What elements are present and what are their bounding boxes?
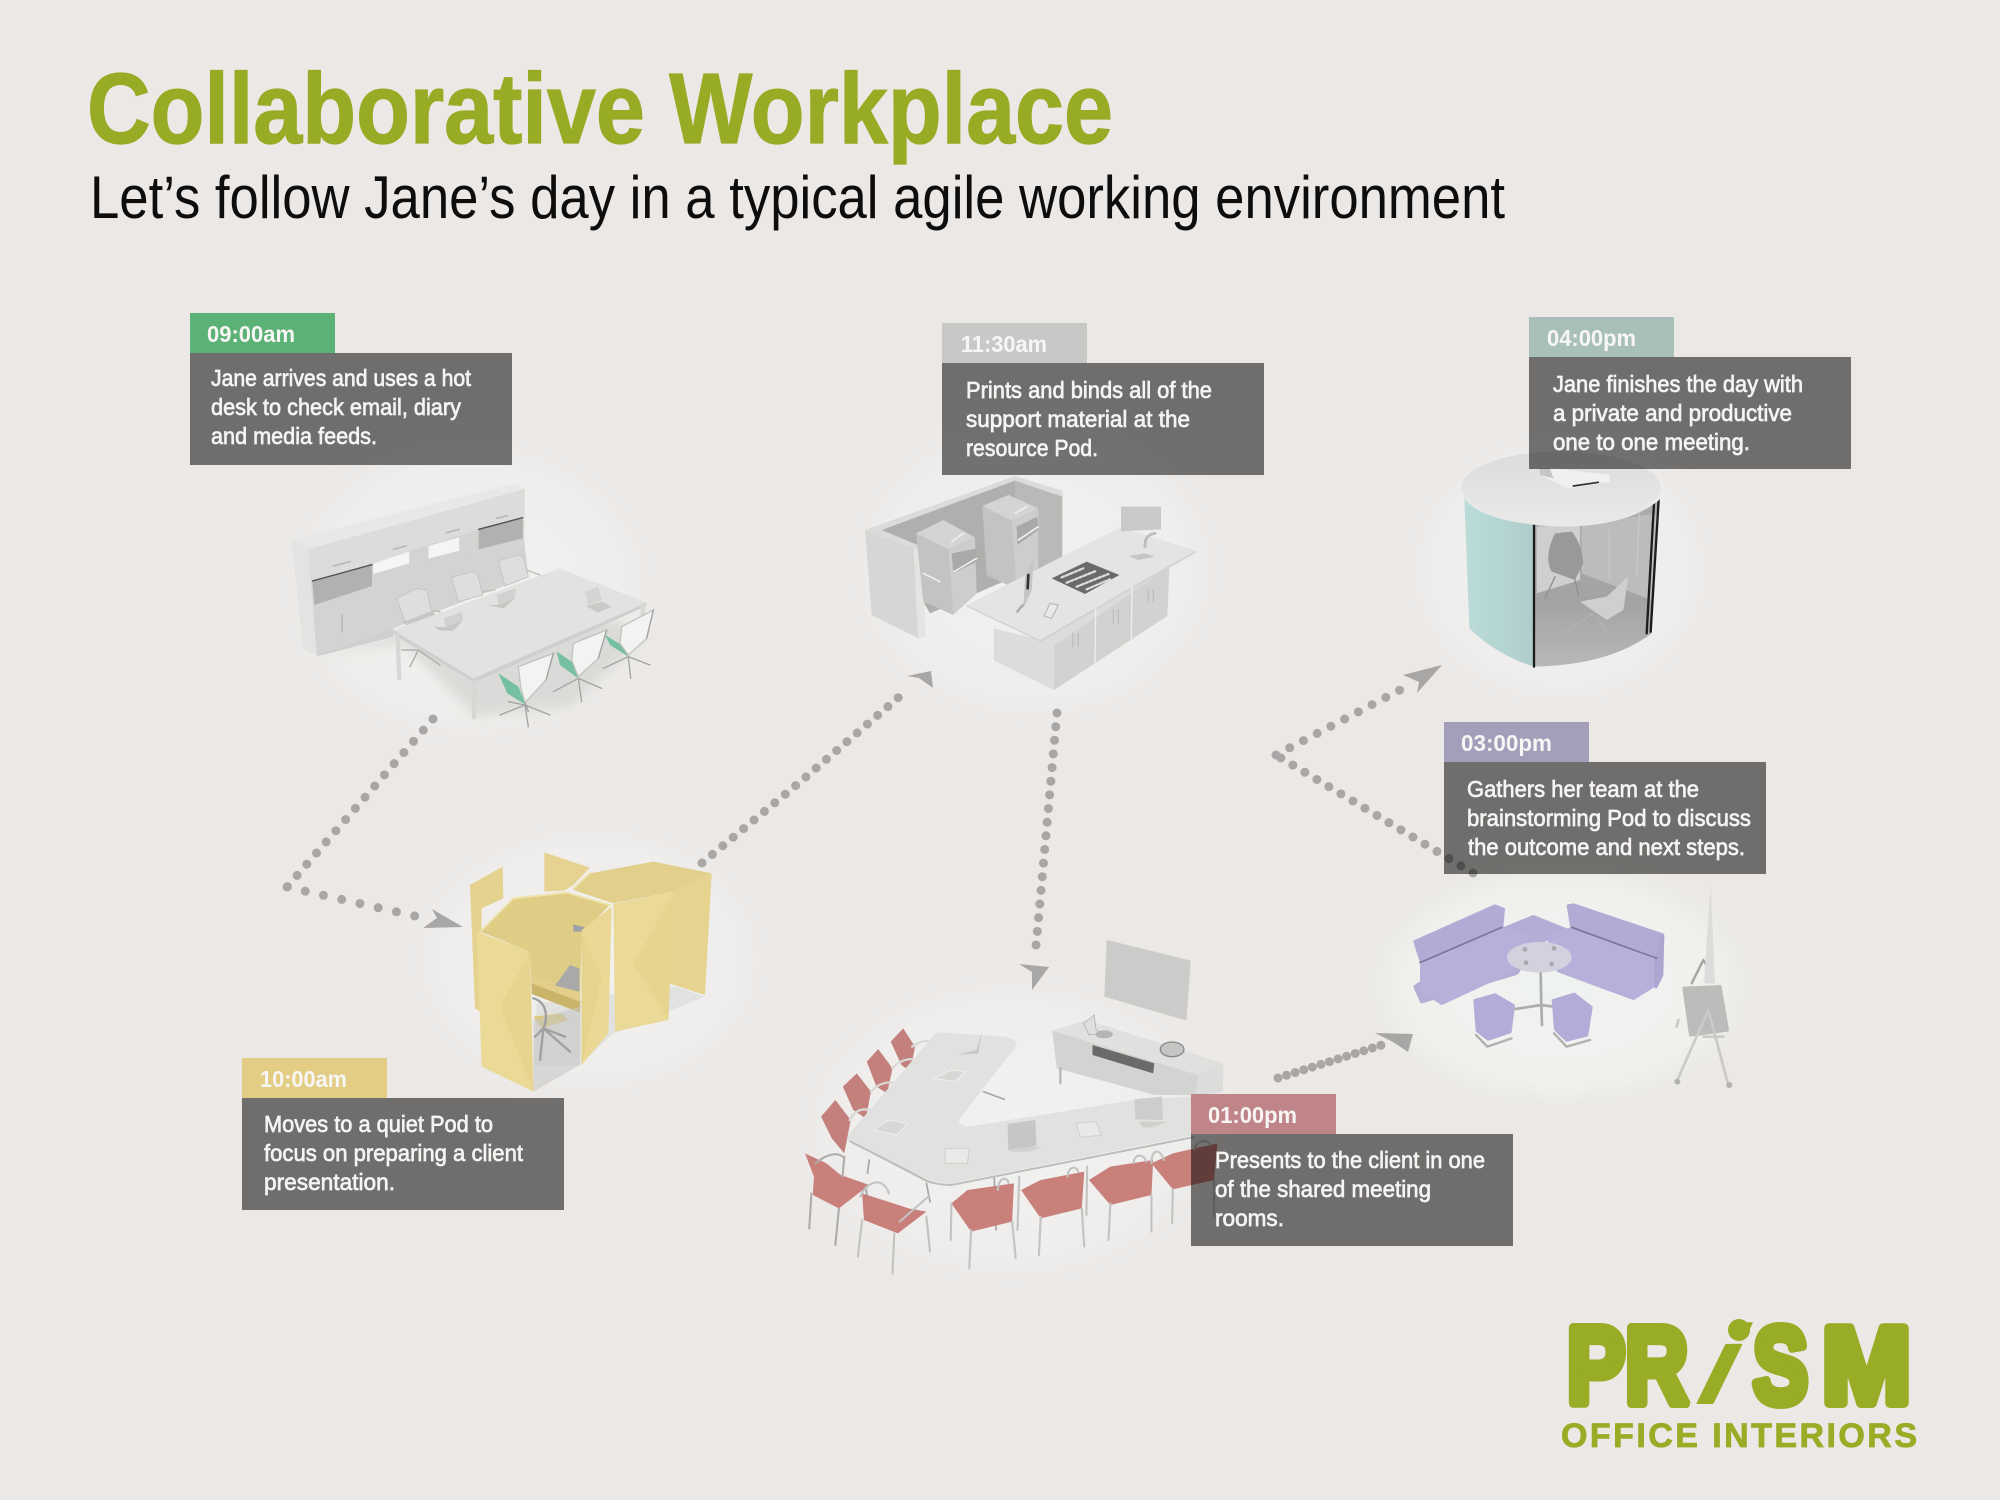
floor glows xyxy=(240,380,1780,1320)
callout: 09:00am: Jane arrives and uses a hot xyxy=(211,365,471,391)
callout: 03:00pm: the outcome and next steps. xyxy=(1468,834,1745,860)
illustration: meeting room xyxy=(805,940,1224,1273)
wall screen xyxy=(1104,940,1191,1021)
storage wall xyxy=(292,483,528,656)
illustration: resource pod xyxy=(865,476,1196,690)
callout: 01:00pm: of the shared meeting xyxy=(1215,1176,1431,1202)
callout: 01:00pm xyxy=(1191,1094,1513,1246)
shadow xyxy=(533,987,705,1067)
table with laptops xyxy=(848,1032,1194,1230)
logo tagline: OFFICE INTERIORS xyxy=(1561,1417,1917,1455)
callout: 04:00pm: Jane finishes the day with xyxy=(1553,371,1803,397)
callout: 11:30am: resource Pod. xyxy=(966,435,1098,461)
back row chairs xyxy=(821,1028,932,1153)
callout: 09:00am: 09:00am xyxy=(207,321,295,347)
logo wordmark: M xyxy=(1822,1305,1911,1427)
arrow: desk to quiet pod xyxy=(287,719,463,928)
front row chairs xyxy=(805,1141,1217,1273)
front row chairs xyxy=(498,610,653,727)
printer 2 xyxy=(982,495,1038,589)
callout: 03:00pm: 03:00pm xyxy=(1461,730,1552,756)
teal wall xyxy=(1464,490,1534,667)
callout: 01:00pm: 01:00pm xyxy=(1208,1102,1297,1128)
front pod xyxy=(477,893,612,1092)
callout: 10:00am: presentation. xyxy=(264,1169,395,1195)
illustration: meeting pod xyxy=(1462,451,1660,667)
counter xyxy=(967,527,1196,690)
callout: 09:00am: and media feeds. xyxy=(211,423,377,449)
logo wordmark: PR xyxy=(1567,1305,1688,1427)
callout: 11:30am: 11:30am xyxy=(961,331,1047,357)
callout: 03:00pm xyxy=(1444,722,1766,874)
illustration: brainstorming pod xyxy=(1415,885,1732,1088)
callout: 03:00pm: brainstorming Pod to discuss xyxy=(1467,805,1751,831)
subtitle: Let’s follow Jane’s day in a typical agile working environment xyxy=(90,164,1505,231)
illustration: hot desk xyxy=(292,483,653,727)
table xyxy=(393,568,647,717)
callout: 11:30am xyxy=(942,323,1264,475)
round table xyxy=(1507,942,1572,1025)
arrow: resource pod to meeting room xyxy=(1019,713,1057,990)
sofa xyxy=(1415,905,1663,1003)
logo: Prism Office Interiors xyxy=(1561,1304,1917,1455)
callout: 04:00pm: a private and productive xyxy=(1553,400,1792,426)
back left pod xyxy=(470,852,590,1012)
whiteboard on easel xyxy=(1674,885,1732,1088)
glass room xyxy=(1534,500,1658,667)
logo wordmark: S xyxy=(1753,1305,1808,1427)
partition walls xyxy=(865,476,1062,638)
arrow: brainstorming pod to meeting pod xyxy=(1276,665,1473,873)
laptops xyxy=(433,587,612,631)
arrow: meeting room to brainstorming pod xyxy=(1278,1033,1413,1078)
callout: 01:00pm: rooms. xyxy=(1215,1205,1284,1231)
stools xyxy=(1475,994,1591,1047)
logo wordmark: i xyxy=(1678,1304,1769,1427)
callout: 09:00am xyxy=(190,313,512,465)
callout: 10:00am: Moves to a quiet Pod to xyxy=(264,1111,493,1137)
chairs inside xyxy=(1545,532,1628,637)
floor shadow xyxy=(317,610,650,717)
callout: 10:00am xyxy=(242,1058,564,1210)
right pod xyxy=(573,862,712,1032)
callout: 09:00am: desk to check email, diary xyxy=(211,394,461,420)
callout: 03:00pm: Gathers her team at the xyxy=(1467,776,1699,802)
callout: 04:00pm xyxy=(1529,317,1851,469)
callout: 01:00pm: Presents to the client in one xyxy=(1215,1147,1485,1173)
roof xyxy=(1462,451,1660,527)
illustration: quiet pods xyxy=(470,852,712,1092)
callout: 11:30am: Prints and binds all of the xyxy=(966,377,1212,403)
door frames xyxy=(1534,500,1659,667)
monitors and items xyxy=(1017,507,1161,618)
callout: 04:00pm: 04:00pm xyxy=(1547,325,1636,351)
logo wordmark xyxy=(1567,1304,1911,1427)
callout: 04:00pm: one to one meeting. xyxy=(1553,429,1750,455)
callout: 10:00am: focus on preparing a client xyxy=(264,1140,523,1166)
arrow: quiet pod to resource pod xyxy=(702,671,933,863)
callout: 11:30am: support material at the xyxy=(966,406,1190,432)
title: Collaborative Workplace xyxy=(87,53,1113,165)
back row chairs xyxy=(397,555,540,627)
callout: 10:00am: 10:00am xyxy=(260,1066,347,1092)
printer 1 xyxy=(916,520,977,615)
sideboard xyxy=(1052,1015,1224,1097)
